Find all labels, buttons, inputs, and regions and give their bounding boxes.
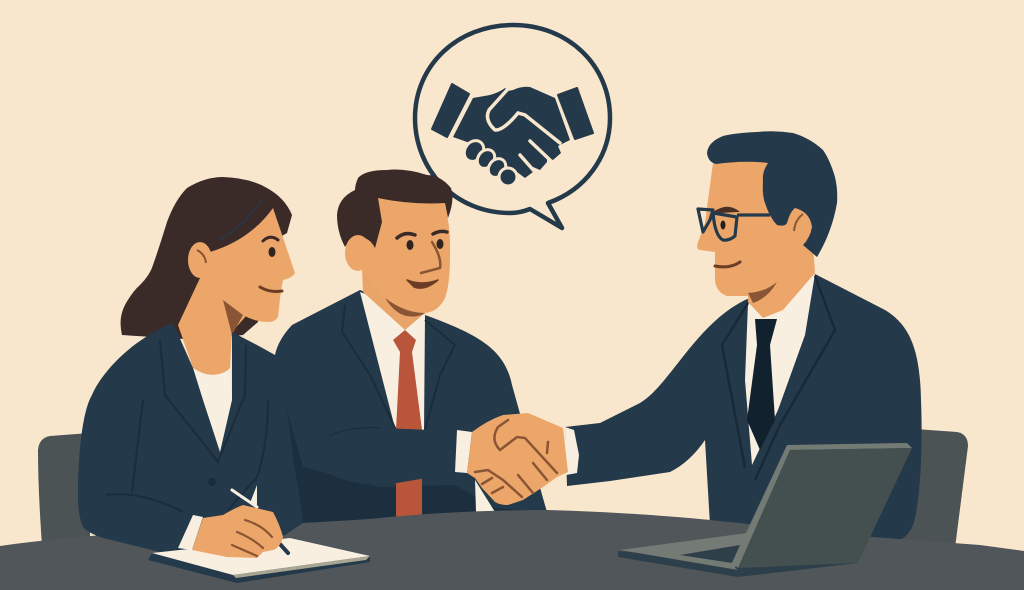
centre man tie: [393, 330, 422, 518]
woman blouse: [193, 368, 232, 452]
right man brow: [715, 208, 737, 212]
centre man neck: [362, 268, 445, 330]
bubble outline: [415, 25, 610, 228]
woman hair strand: [220, 200, 262, 240]
notebook edge: [233, 556, 370, 578]
speech bubble: [415, 25, 610, 228]
woman jacket: [78, 323, 303, 557]
right man ear detail: [794, 214, 803, 231]
woman ear detail: [197, 250, 206, 263]
right man hair: [707, 131, 837, 257]
centre man shirt: [360, 292, 425, 432]
centre man lower shadow: [287, 410, 547, 528]
woman brow and mouth: [260, 237, 282, 292]
woman neck: [178, 278, 260, 375]
centre man chin shadow: [385, 298, 425, 317]
centre man arm: [303, 428, 458, 485]
centre man: [275, 170, 547, 528]
centre man eyes: [406, 239, 444, 250]
woman cuff: [178, 515, 203, 550]
right man jacket: [565, 274, 922, 540]
right man neck: [748, 245, 815, 318]
woman: [78, 177, 303, 557]
laptop: [618, 443, 912, 577]
notebook page: [152, 538, 370, 575]
gap under the handshake: [475, 480, 495, 512]
centre man ear: [345, 235, 371, 271]
woman hand: [192, 505, 283, 558]
icon: handshake: [432, 84, 593, 186]
left chair: [38, 433, 90, 545]
finger lines: [475, 420, 557, 497]
woman eye: [268, 247, 276, 257]
right man cuff: [565, 427, 579, 475]
centre man face: [360, 198, 450, 316]
centre man jacket: [275, 290, 547, 528]
centre man hair: [337, 170, 452, 248]
table: [0, 510, 1024, 590]
woman jacket lines: [105, 340, 268, 512]
centre man jacket lines: [330, 305, 455, 437]
centre man cuff: [455, 430, 472, 473]
right chair: [900, 429, 968, 548]
laptop keyboard deck: [620, 533, 747, 570]
right man glasses: [698, 209, 770, 240]
centre man brows and nose: [397, 231, 447, 273]
right man eye: [720, 220, 726, 230]
woman hand lines: [232, 520, 272, 556]
woman face: [200, 208, 295, 322]
right man ear: [784, 207, 812, 247]
laptop base underside: [618, 551, 858, 577]
woman ear: [188, 242, 212, 278]
laptop screen bezel: [732, 443, 912, 568]
blouse sliver: [250, 485, 257, 505]
laptop keyboard recess: [680, 545, 740, 563]
woman neck shadow: [223, 300, 243, 335]
pen: [232, 490, 288, 553]
handshake: [467, 413, 568, 505]
laptop screen: [738, 448, 912, 568]
notebook underside: [148, 538, 370, 583]
right man mouth: [715, 262, 740, 267]
right man face: [697, 160, 813, 296]
right man lapels: [722, 276, 835, 480]
woman jacket button: [208, 478, 216, 486]
centre man mouth: [407, 280, 438, 288]
right man shirt: [745, 274, 815, 465]
hands: [467, 413, 568, 505]
right man: [565, 131, 922, 540]
woman writing hand: [178, 490, 288, 558]
notebook: [148, 538, 370, 583]
right man tie: [747, 319, 777, 450]
right man chin shadow: [748, 282, 777, 303]
woman hair: [121, 177, 292, 340]
